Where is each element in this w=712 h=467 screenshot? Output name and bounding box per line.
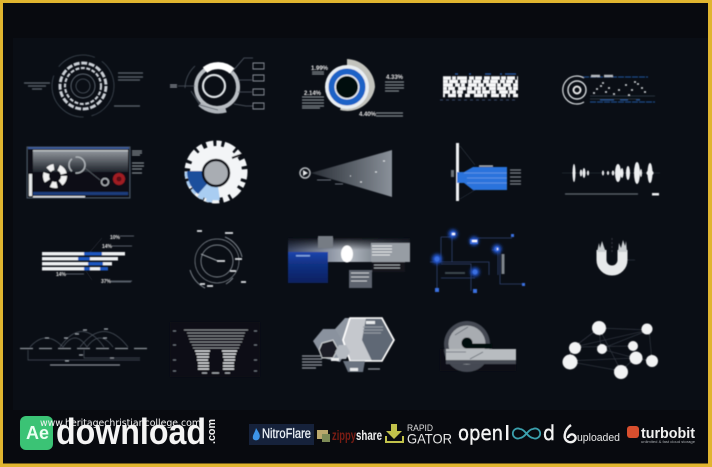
- logo: Rapid Gator: [385, 423, 452, 446]
- panel: dashboard screen: [27, 147, 144, 198]
- panel: funnel striped chart: [170, 322, 260, 377]
- panel: horizontal bars with percentages: [42, 235, 134, 285]
- panel: blue funnel bar chart: [451, 143, 521, 201]
- label: left percentage: 2.14%: [304, 91, 322, 97]
- panel: arc network timeline: [20, 329, 148, 365]
- logo: openload: open: [458, 421, 503, 445]
- logo: NitroFlare: NitroFlare: [262, 426, 311, 441]
- logo: uploaded: [565, 425, 620, 444]
- panel: pixel block grid: [440, 74, 518, 100]
- panel: radar target rings: [190, 231, 246, 288]
- label: 37%: 37%: [101, 279, 112, 285]
- logo: uploaded: uploaded: [577, 432, 620, 444]
- label: right percentage: 4.33%: [386, 75, 404, 81]
- logo: openload: d: [543, 421, 555, 445]
- logo: NitroFlare: [249, 424, 314, 445]
- logo: .com rotated: .com: [206, 419, 218, 444]
- label: 10%: 10%: [110, 235, 121, 241]
- logo: zippyshare: share: [356, 427, 382, 443]
- label: 14%: 14%: [102, 244, 113, 250]
- logo: Ae badge: [20, 416, 53, 450]
- logo: zippyshare: zippy: [332, 427, 356, 443]
- panel: U shaped equalizer: [597, 238, 635, 270]
- logo: turbobit: [627, 425, 695, 444]
- logo: openload: [458, 421, 555, 445]
- label: bottom percentage: 4.40%: [359, 112, 377, 118]
- logo: Ae badge: Ae: [26, 423, 49, 443]
- panel: blue glow info boxes: [288, 236, 410, 288]
- watermark url: www.heritagechristiancollege.com: [40, 418, 201, 429]
- panel: concentric HUD dial: [24, 55, 143, 117]
- logo: zippyshare: [317, 427, 382, 443]
- panel: radar with scatter data: [563, 76, 655, 104]
- panel: C shaped gauge: [440, 321, 516, 372]
- label: top left percentage: 1.99%: [311, 66, 329, 72]
- logo: turbobit: unlimited & fast cloud storage: [641, 440, 695, 444]
- panel: blue ring donut with percentages: [302, 59, 404, 118]
- panel: cone beam chart: [300, 150, 392, 197]
- logo: turbobit: turbobit: [641, 425, 695, 442]
- logo: download wordmark: download: [56, 411, 206, 452]
- panel: gauge ring with labels: [170, 58, 264, 111]
- panel: white gear with blue sector: [186, 144, 244, 201]
- panel: hexagon cluster: [302, 318, 394, 372]
- label: 14% lower: 14%: [56, 272, 67, 278]
- panel: node link graph: [562, 321, 658, 379]
- panel: blue circuit nodes: [430, 230, 525, 293]
- logo: Rapid Gator: GATOR: [407, 430, 452, 446]
- logo: Rapid Gator: RAPID: [407, 423, 433, 433]
- panel: audio waveform: [562, 162, 660, 196]
